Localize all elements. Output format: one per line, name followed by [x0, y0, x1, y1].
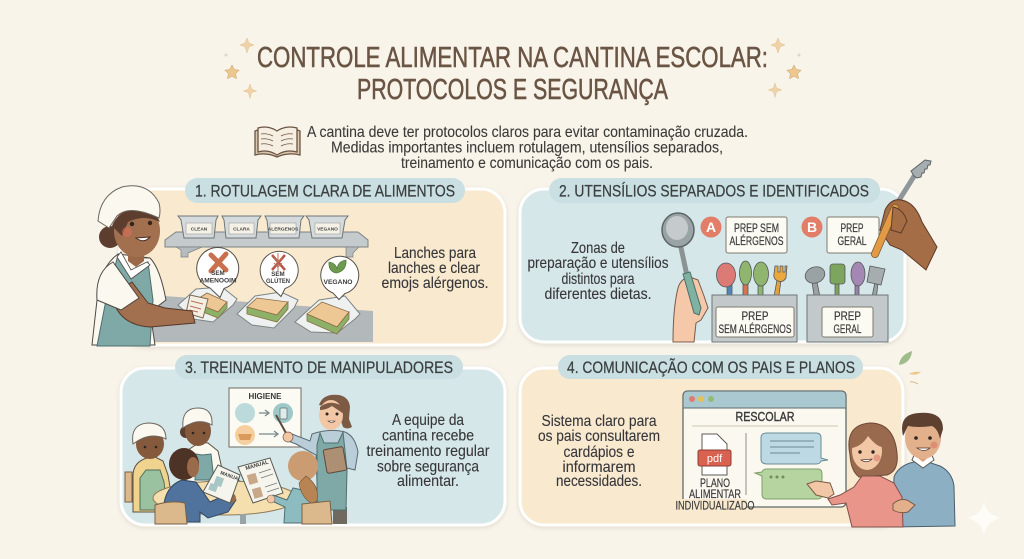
trainee back [180, 408, 222, 485]
panel 3: treinamento [121, 355, 505, 525]
manuals: MANUAL [219, 470, 242, 483]
allergen callouts: GLÚTEN [266, 278, 290, 285]
hygiene poster: HIGIENE [249, 392, 282, 401]
utensil holder: sem alergenos: SEM ALÉRGENOS [718, 323, 792, 336]
panel 4: comunicacao [520, 355, 955, 527]
icon: sparkle [968, 501, 1000, 536]
title [257, 42, 768, 106]
panel 2 text: Zonas de [571, 240, 625, 257]
hygiene poster [229, 388, 301, 447]
chairs [155, 501, 332, 524]
panel 4: comunicacao: necessidades. [556, 473, 642, 490]
browser window: ALIMENTAR [689, 489, 741, 501]
title: CONTROLE ALIMENTAR NA CANTINA ESCOLAR: [257, 42, 768, 74]
chat bubbles [761, 433, 828, 464]
panel 1: rotulagem [92, 178, 505, 346]
girl [267, 451, 319, 523]
panel 3: treinamento: alimentar. [397, 473, 459, 490]
panel 3 heading [175, 355, 463, 379]
zone labels: A [706, 219, 716, 235]
zone labels [700, 216, 879, 253]
intro text: treinamento e comunicação com os pais. [401, 155, 653, 172]
father [893, 413, 955, 527]
icon: pdf document: pdf [707, 453, 723, 465]
manuals: MANUAL [245, 459, 270, 472]
manuals [203, 458, 283, 503]
browser window: RESCOLAR [736, 409, 794, 424]
intro text [307, 124, 748, 172]
zone labels: GERAL [838, 236, 867, 248]
parents [807, 413, 955, 527]
shelf with labelled bins: VEGANO [317, 226, 338, 232]
panel 1 text: Lanches para [394, 245, 476, 262]
zone labels: PREP [840, 223, 864, 235]
allergen callouts: VEGANO [324, 279, 353, 286]
panel 2 heading [549, 178, 880, 203]
allergen callouts: AMENOOIM [200, 278, 236, 284]
zone labels: ALÉRGENOS [730, 235, 784, 248]
cook with apron [92, 186, 195, 346]
counter [150, 295, 373, 342]
ladle in hand [662, 213, 708, 342]
utensil holder: sem alergenos [712, 261, 797, 342]
utensil holder: geral [803, 262, 888, 342]
browser window: INDIVIDUALIZADO [676, 500, 755, 512]
sandwich trays [178, 287, 360, 334]
panel 3: treinamento: treinamento regular [366, 443, 490, 460]
zone labels: B [807, 219, 817, 235]
decorative leaves [899, 351, 921, 384]
allergen callouts [197, 247, 359, 300]
zone labels: PREP SEM [734, 223, 779, 235]
utensil holder: geral: PREP [834, 311, 861, 323]
trainees and table [125, 408, 332, 524]
hand holding utensil [875, 160, 937, 270]
icon: open book [255, 127, 300, 157]
utensil holder: sem alergenos: PREP [742, 311, 769, 323]
panel 2: utensilios [520, 160, 937, 342]
utensil holder: geral: GERAL [834, 324, 862, 336]
panel 4: comunicacao: informarem [562, 459, 636, 476]
panel 1: rotulagem: lanches e clear [388, 260, 481, 277]
panel 4: comunicacao: cardápios e [564, 444, 635, 461]
mother [807, 423, 915, 527]
panel 3 text: A equipe da [392, 412, 464, 429]
panel 2: utensilios: preparação e utensílios [528, 255, 668, 272]
panel 4: comunicacao: os pais consultarem [538, 428, 660, 445]
panel 4 text: Sistema claro para [542, 413, 657, 430]
trainer [276, 395, 358, 524]
panel 3 heading: 3. TREINAMENTO DE MANIPULADORES [185, 358, 453, 377]
intro text: A cantina deve ter protocolos claros para evitar contaminação cruzada. [307, 124, 748, 141]
trainee left [133, 423, 172, 512]
title: PROTOCOLOS E SEGURANÇA [357, 74, 668, 106]
browser window [672, 391, 846, 512]
chair back-left [125, 472, 132, 502]
allergen callouts: SEM [271, 271, 285, 278]
plan caption [672, 499, 747, 511]
panel 2: utensilios: diferentes dietas. [544, 286, 652, 303]
decorative stars [224, 38, 801, 98]
intro text: Medidas importantes incluem rotulagem, utensílios separados, [331, 140, 723, 156]
panel 1 heading [185, 178, 465, 203]
table [153, 481, 297, 515]
boy [163, 448, 236, 522]
panel 4 heading [558, 355, 863, 379]
panel 3: treinamento: sobre segurança [377, 458, 479, 476]
panel 2 heading: 2. UTENSÍLIOS SEPARADOS E IDENTIFICADOS [559, 182, 869, 200]
panel 2: utensilios: distintos para [562, 271, 635, 288]
panel 3: treinamento: cantina recebe [382, 428, 474, 444]
shelf with labelled bins: ALERGENOS [268, 226, 299, 232]
panel 1 heading: 1. ROTULAGEM CLARA DE ALIMENTOS [195, 182, 455, 200]
panel 1: rotulagem: emojs alérgenos. [382, 275, 488, 292]
shelf with labelled bins: CLARA [233, 226, 250, 232]
panel 4 heading: 4. COMUNICAÇÃO COM OS PAIS E PLANOS [567, 358, 855, 377]
shelf with labelled bins: CLEAN [191, 226, 208, 232]
browser window: PLANO [700, 478, 730, 490]
shelf with labelled bins [165, 216, 368, 257]
icon: pdf document [698, 434, 731, 475]
allergen callouts: SEM [211, 270, 225, 277]
